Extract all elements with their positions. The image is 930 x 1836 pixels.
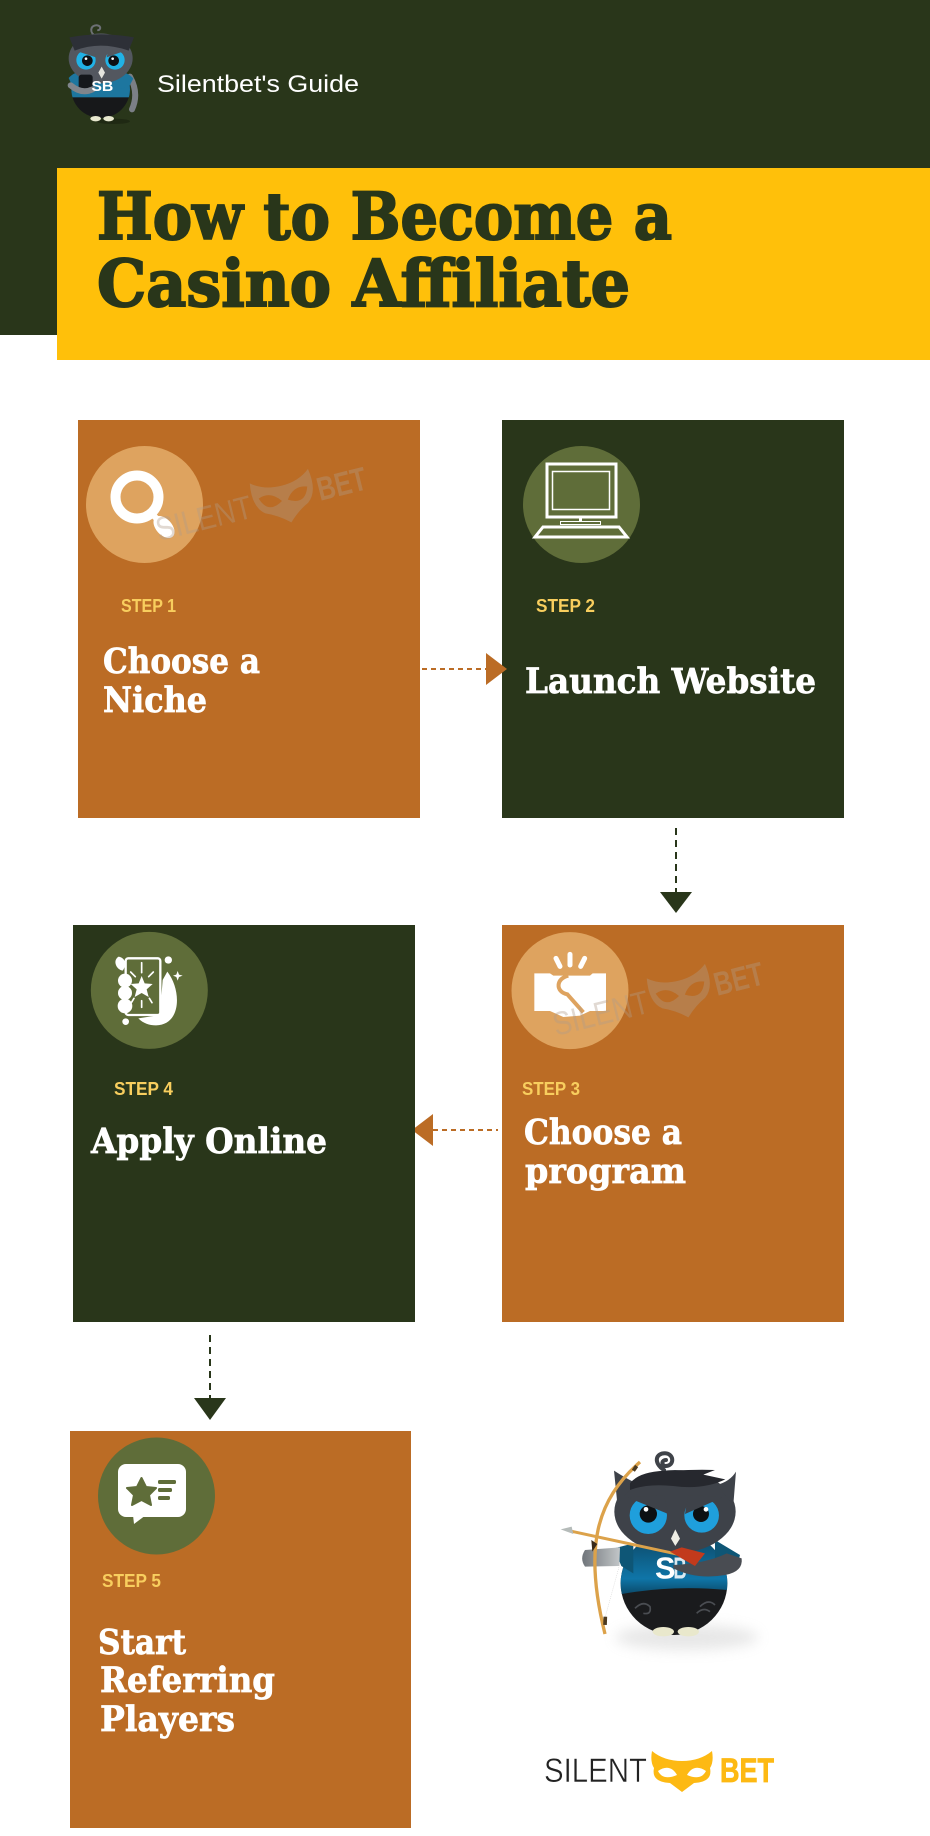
icon: header owl mascot: SB xyxy=(91,79,113,95)
step heading xyxy=(524,1112,686,1192)
step heading: Apply Online xyxy=(90,1121,327,1162)
logo: Silentbet: BET xyxy=(720,1752,774,1790)
icon: phone in hand xyxy=(91,932,208,1049)
title xyxy=(97,179,672,322)
icon: owl mascot with bow and arrow: S xyxy=(655,1551,675,1585)
arrow: step 3 to step 4 xyxy=(412,1114,498,1146)
icon: header owl mascot xyxy=(67,25,137,124)
step heading: Launch Website xyxy=(525,661,816,702)
step heading: program xyxy=(525,1151,686,1192)
step label: STEP 5 xyxy=(102,1571,161,1591)
logo: Silentbet xyxy=(544,1751,774,1792)
arrow: step 1 to step 2 xyxy=(422,653,507,685)
step label: STEP 3 xyxy=(522,1079,580,1099)
icon: owl mask xyxy=(651,1751,713,1792)
icon: handshake xyxy=(511,932,628,1049)
header band xyxy=(0,0,930,335)
watermark: BET xyxy=(710,955,767,1003)
step label: STEP 4 xyxy=(114,1079,173,1099)
step heading: Choose a xyxy=(103,641,260,682)
watermark xyxy=(151,456,372,555)
icon: owl mascot with bow and arrow xyxy=(561,1453,758,1650)
step heading: Niche xyxy=(103,680,207,721)
step label: STEP 1 xyxy=(121,596,176,616)
title banner xyxy=(57,168,930,360)
header text: Silentbet's Guide xyxy=(157,71,359,98)
logo: Silentbet: SILENT xyxy=(544,1752,647,1790)
panel: step 2 xyxy=(502,420,844,818)
panel: step 5 xyxy=(70,1431,411,1828)
panel: step 1 xyxy=(78,420,420,818)
watermark: BET xyxy=(313,460,370,508)
panel: step 4 xyxy=(73,925,415,1322)
step label: STEP 2 xyxy=(536,596,595,616)
step heading xyxy=(98,1622,275,1740)
step heading: Players xyxy=(100,1699,235,1740)
step heading xyxy=(103,641,260,721)
icon: magnifying glass xyxy=(86,446,203,563)
step heading: Referring xyxy=(100,1660,275,1701)
watermark: SILENT xyxy=(152,488,256,548)
arrow: step 2 to step 3 xyxy=(660,828,692,913)
title: Casino Affiliate xyxy=(97,246,630,322)
icon: owl mascot with bow and arrow: B xyxy=(673,1551,687,1585)
panel: step 3 xyxy=(502,925,844,1322)
icon: review speech bubble xyxy=(98,1438,215,1554)
title: How to Become a xyxy=(97,179,672,255)
watermark xyxy=(548,951,769,1050)
icon: computer xyxy=(523,446,640,563)
arrow: step 4 to step 5 xyxy=(194,1335,226,1420)
watermark: SILENT xyxy=(549,983,653,1043)
step heading: Choose a xyxy=(524,1112,682,1153)
step heading: Start xyxy=(98,1622,186,1663)
